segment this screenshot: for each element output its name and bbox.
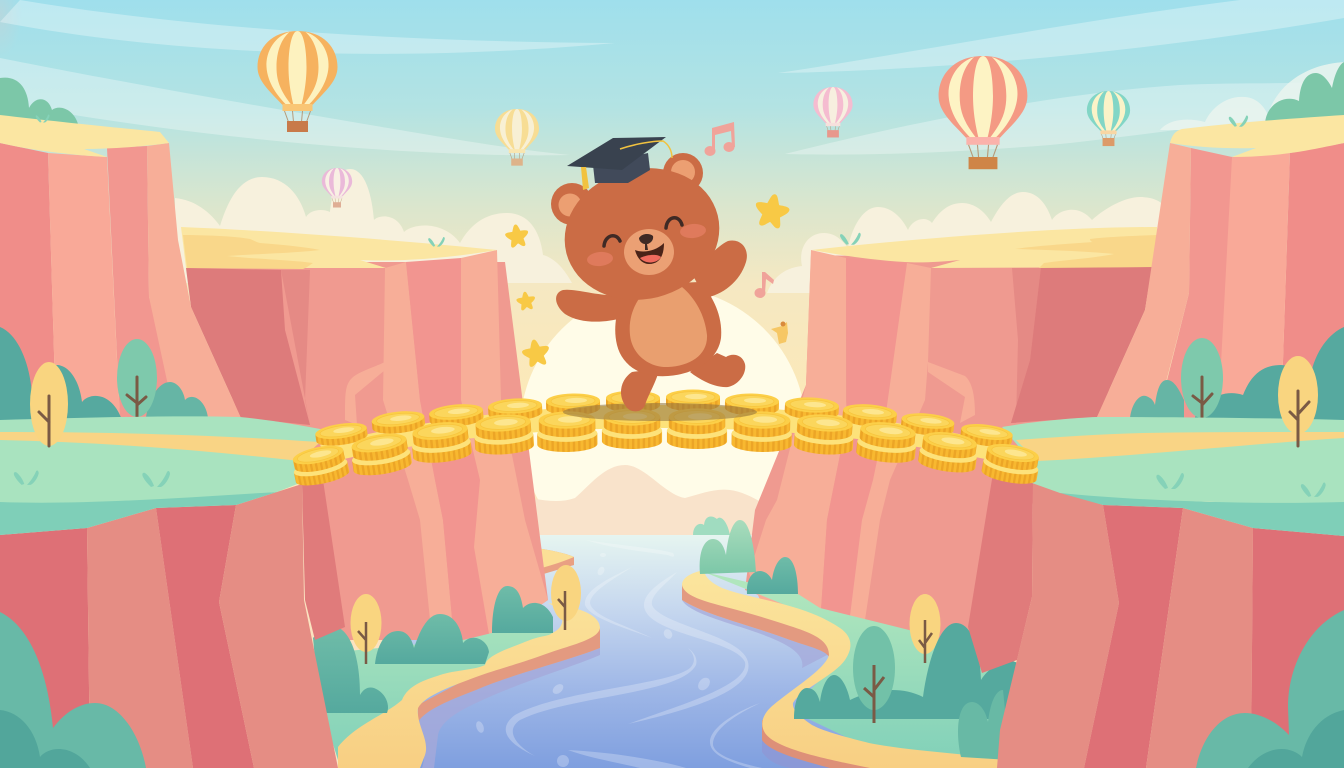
bank tree yellow 366 <box>350 594 382 664</box>
bank tree yellow 565 <box>551 565 581 630</box>
stars <box>504 191 792 368</box>
upper left cliff sand top <box>0 115 169 157</box>
middle right cliff <box>745 250 1152 670</box>
bank bush small right <box>747 557 798 594</box>
bear body <box>615 282 721 376</box>
bank tree yellow 925 <box>910 594 940 663</box>
left shrubs row <box>0 327 208 420</box>
bear left arm <box>556 290 622 322</box>
upper bushes right <box>1265 62 1344 124</box>
bank bush left tall <box>313 627 388 713</box>
middle left cliff <box>186 250 548 640</box>
bank tree teal <box>853 626 895 723</box>
bank bush front right <box>958 690 1010 760</box>
front row coin stacks <box>290 408 1042 489</box>
bear belly <box>630 287 707 367</box>
balloon pale yellow <box>495 109 539 166</box>
lower left cliff <box>0 480 345 768</box>
distant mountains <box>510 465 800 535</box>
tree teal left <box>117 339 157 427</box>
clouds upper right <box>1160 62 1344 130</box>
bear muzzle <box>624 229 674 275</box>
bank bush wide left <box>375 614 489 664</box>
clouds left <box>175 169 572 283</box>
graduation cap <box>567 137 672 190</box>
bear right arm <box>690 240 747 298</box>
music note small <box>754 272 774 298</box>
bank bush mid left <box>492 586 553 633</box>
far sand bank <box>530 547 574 575</box>
balloon pink <box>813 87 853 137</box>
music note large <box>704 122 735 156</box>
left plateau grass <box>0 416 335 535</box>
sky streaks <box>0 0 1344 155</box>
bear blush <box>586 223 707 267</box>
middle left cliff sand top <box>181 227 497 269</box>
bear head <box>551 152 733 316</box>
foreground bush left <box>0 612 146 768</box>
bank bush upper right <box>700 520 756 574</box>
bank bush distant <box>693 517 730 535</box>
upper bushes left <box>0 78 78 124</box>
bear <box>551 137 747 411</box>
upper right cliff sand top <box>1170 115 1344 157</box>
bear nose <box>639 234 653 250</box>
balloon lilac <box>322 168 352 208</box>
sun <box>520 287 806 573</box>
balloon red <box>939 56 1027 169</box>
tree teal right <box>1181 338 1223 427</box>
grass tufts <box>14 114 1326 497</box>
river bank right <box>682 570 1005 768</box>
foreground bush right <box>1196 610 1344 768</box>
river <box>395 535 895 768</box>
river highlights <box>475 540 762 768</box>
bee sparkle <box>771 322 788 344</box>
upper right cliff <box>1097 143 1344 420</box>
coin bridge <box>290 390 1042 489</box>
bear right leg <box>690 353 745 387</box>
corner vignette <box>0 0 22 57</box>
bear shadow on coins <box>563 403 757 421</box>
back row coins <box>314 390 1014 449</box>
bank bushes large right <box>794 623 1020 719</box>
river bank left <box>305 603 600 768</box>
balloon orange <box>258 31 338 132</box>
upper left cliff <box>0 143 241 420</box>
tree yellow right <box>1278 356 1318 446</box>
bear ear left <box>551 183 593 225</box>
clouds right <box>767 192 1165 293</box>
bridge glow <box>320 405 1010 462</box>
right plateau grass <box>1002 417 1344 536</box>
bear eyes <box>604 218 682 246</box>
lower right cliff <box>968 473 1344 768</box>
tree yellow left <box>30 362 68 446</box>
middle right cliff sand top <box>812 227 1157 268</box>
bear mouth <box>635 243 664 264</box>
balloon teal <box>1087 91 1130 146</box>
bear left leg <box>621 368 660 411</box>
right shrubs row <box>1130 327 1344 420</box>
bear ear right <box>663 153 703 193</box>
